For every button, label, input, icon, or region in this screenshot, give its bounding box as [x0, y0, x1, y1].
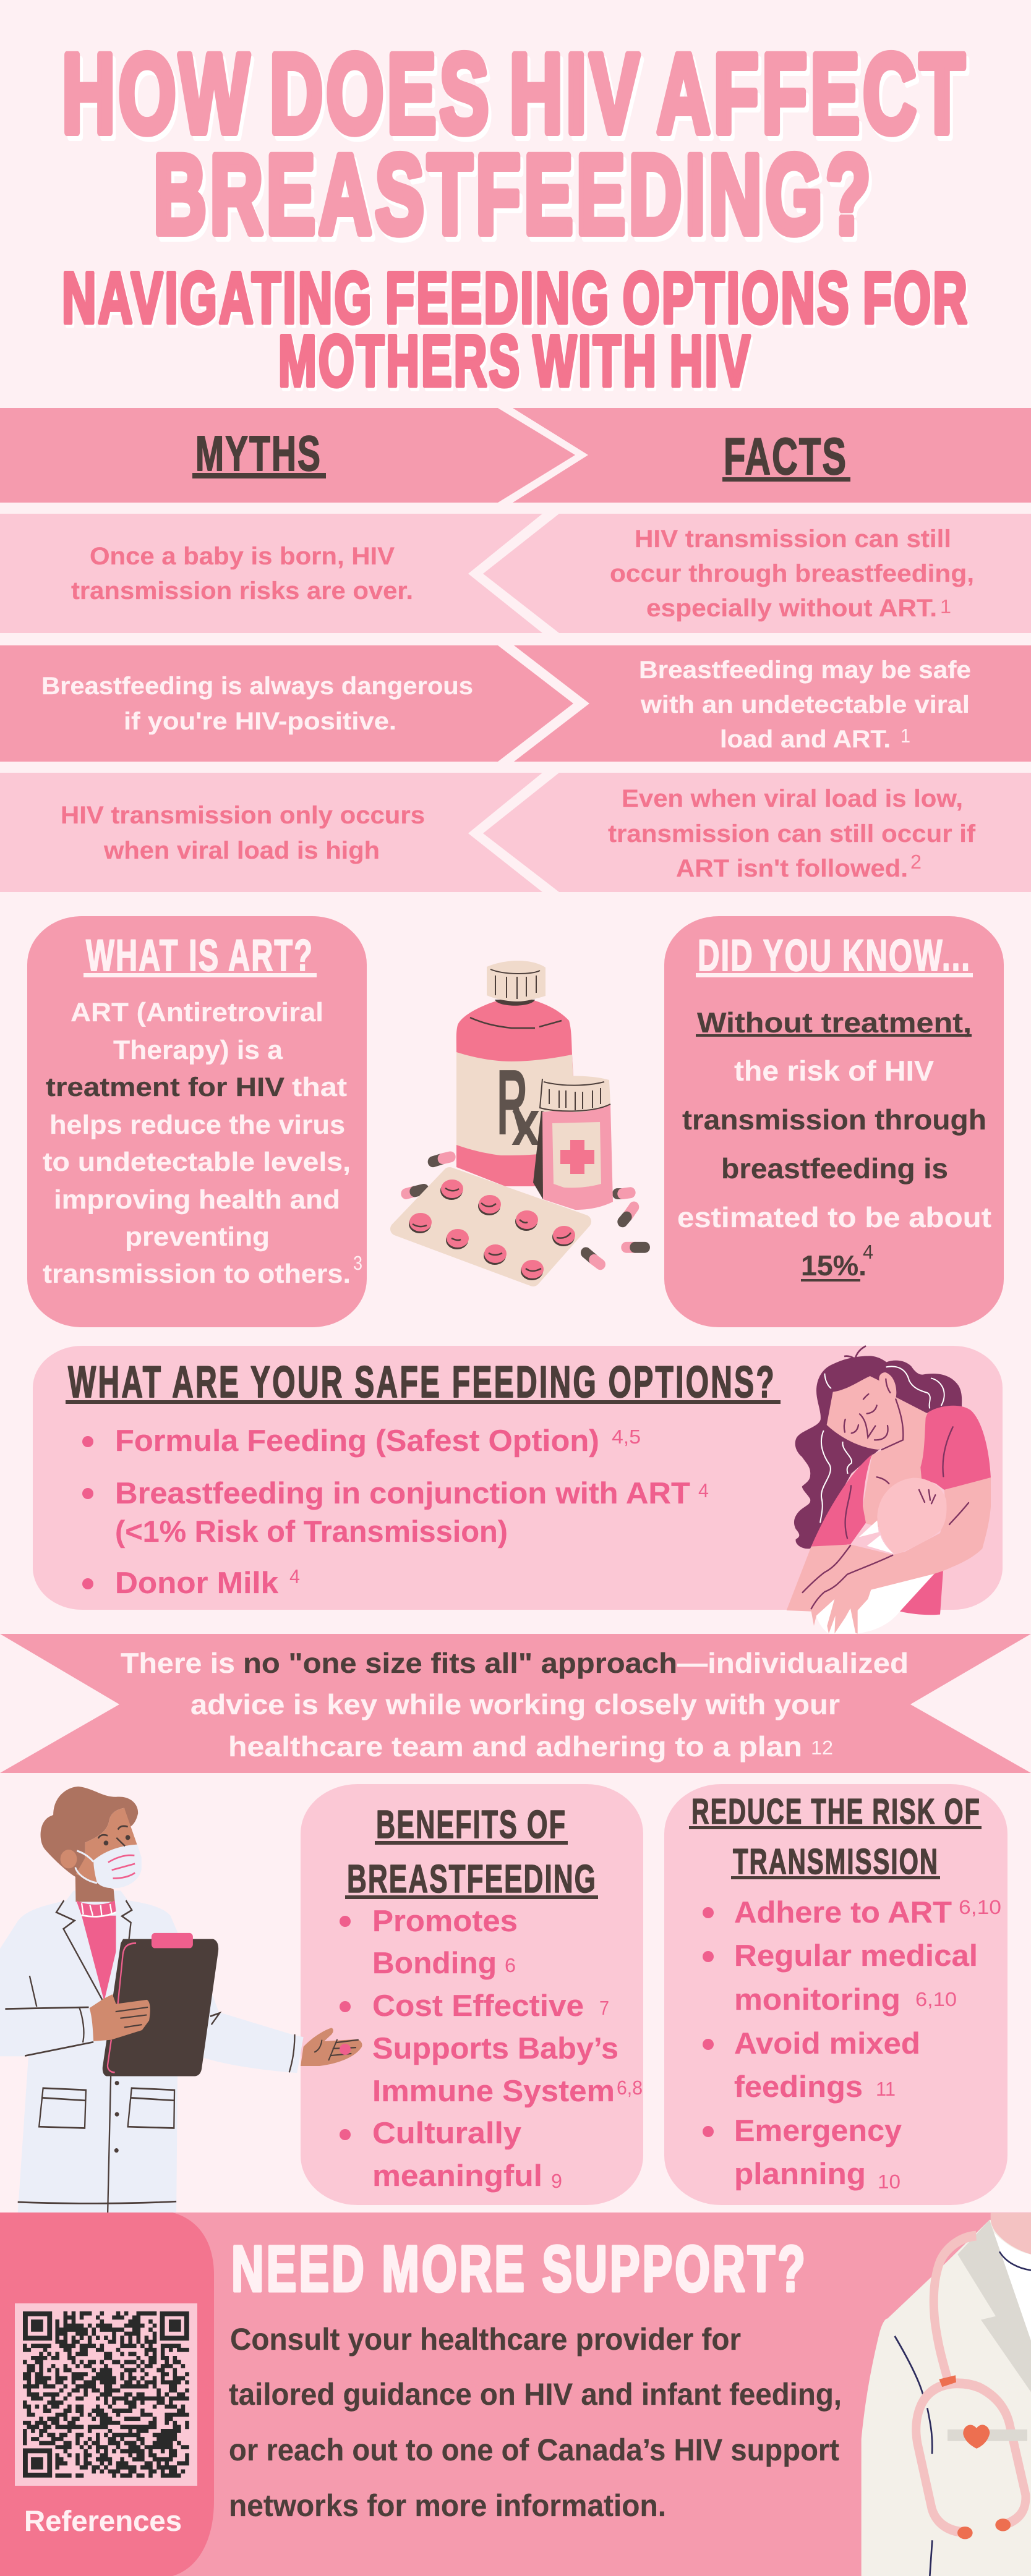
capsules	[406, 1157, 645, 1264]
panel: benefits of breastfeeding text	[340, 1802, 643, 2193]
list: benefits: meaningful	[372, 2159, 542, 2193]
panel: need more support footer	[0, 2213, 1031, 2576]
big bottle: R	[497, 1050, 528, 1154]
text: no one size fits all: —individualized	[677, 1647, 909, 1679]
list: benefits: Bonding	[372, 1947, 497, 1980]
small bottle	[533, 1076, 613, 1210]
illustration: doctor with clipboard	[0, 1787, 362, 2213]
myth fact row 1	[0, 514, 1031, 633]
heading: benefits: BENEFITS OF	[376, 1802, 567, 1847]
heading: benefits	[345, 1802, 598, 1901]
myth 3: HIV transmission only occurs	[61, 802, 425, 829]
banner: individualized advice	[0, 1634, 1031, 1773]
list: reduce risk: Adhere to ART	[734, 1896, 952, 1929]
title	[62, 30, 968, 257]
panel: what is ART	[27, 916, 367, 1327]
myths heading: MYTHS	[195, 426, 322, 481]
heading: reduce the risk	[689, 1792, 982, 1882]
fact 3: Even when viral load is low,	[622, 785, 963, 812]
text: ART definition: preventing	[125, 1222, 270, 1252]
myth 2	[41, 673, 473, 735]
fact 1: 1	[940, 595, 951, 618]
list: feeding options: Donor Milk	[115, 1566, 279, 1600]
list: feeding options	[82, 1424, 709, 1600]
list: reduce risk: feedings	[734, 2070, 863, 2104]
myth 2: if you're HIV-positive.	[124, 708, 396, 735]
panel: reduce the risk text	[689, 1792, 1001, 2193]
heading: what is ART: WHAT IS ART?	[86, 931, 314, 980]
text: consult your provider: Consult your healthcare provider for	[230, 2322, 741, 2357]
panel: reduce risk background	[664, 1784, 1007, 2205]
text: transmission risk fact: breastfeeding is	[721, 1152, 948, 1184]
myth 3: when viral load is high	[103, 837, 380, 864]
text: consult your provider: or reach out to one of Canada’s HIV support	[229, 2433, 839, 2467]
subtitle: MOTHERS WITH HIV	[278, 320, 752, 401]
illustration: doctor coat with stethoscope	[862, 2213, 1031, 2576]
list: feeding options: (<1% Risk of Transmission)	[115, 1515, 508, 1549]
text: ART definition: helps reduce the virus	[49, 1110, 345, 1140]
illustration: mother breastfeeding	[787, 1346, 991, 1634]
myth 3	[61, 802, 425, 864]
list: benefits: 6	[505, 1954, 516, 1976]
text: ART definition: treatment for HIV	[46, 1073, 284, 1102]
list: benefits: Immune System	[372, 2075, 615, 2108]
myth fact row 3	[0, 773, 1031, 892]
list: reduce risk: 11	[876, 2078, 896, 2100]
myth 1: Once a baby is born, HIV	[90, 543, 395, 570]
text: consult your provider	[229, 2322, 842, 2523]
list: benefits: 7	[599, 1997, 609, 2019]
text: no one size fits all: advice is key while working closely with your	[190, 1688, 840, 1720]
fact 1: occur through breastfeeding,	[610, 560, 974, 587]
list: benefits: 6,8	[617, 2077, 643, 2099]
list: benefits: Promotes	[372, 1905, 518, 1938]
fact 2: with an undetectable viral	[640, 691, 970, 718]
text: ART definition: transmission to others.	[43, 1259, 351, 1289]
big bottle: x	[511, 1087, 540, 1159]
text: no one size fits all: healthcare team and adhering to a plan	[228, 1730, 802, 1762]
myth fact row 2	[0, 645, 1031, 762]
text: ART definition: Therapy) is a	[113, 1035, 283, 1065]
list: benefits: Cost Effective	[372, 1989, 584, 2023]
heading: what is ART	[83, 931, 317, 980]
big bottle	[456, 961, 575, 1186]
text: ART definition: 3	[353, 1252, 362, 1274]
fact 2: 1	[901, 725, 910, 747]
subtitle	[62, 257, 969, 401]
myths and facts header band	[0, 408, 1031, 503]
fact 3: 2	[910, 851, 922, 873]
text: transmission risk fact: transmission through	[682, 1103, 986, 1136]
text: no one size fits all	[121, 1647, 909, 1762]
text: transmission risk fact: the risk of HIV	[734, 1055, 934, 1087]
list: reduce risk	[703, 1896, 1001, 2193]
list: reduce risk: monitoring	[734, 1983, 901, 2017]
text: consult your provider: networks for more information.	[229, 2488, 666, 2523]
list: feeding options: Formula Feeding (Safest Option)	[115, 1424, 599, 1458]
list: reduce risk: Avoid mixed	[734, 2027, 920, 2060]
heading: reduce the risk: TRANSMISSION	[733, 1842, 939, 1882]
list: feeding options: 4	[698, 1479, 709, 1502]
list: benefits: Culturally	[372, 2117, 521, 2150]
icon: medicine bottles and pills	[397, 961, 645, 1280]
list: reduce risk: Regular medical	[734, 1939, 978, 1973]
heading: benefits: BREASTFEEDING	[347, 1856, 597, 1901]
list: benefits: 9	[551, 2170, 562, 2192]
myth 1	[71, 543, 413, 605]
panel: benefits background	[301, 1784, 643, 2205]
fact 3: ART isn't followed.	[676, 855, 908, 882]
list: feeding options: 4	[289, 1565, 300, 1588]
fact 1: HIV transmission can still	[635, 525, 951, 553]
text: ART definition	[43, 998, 362, 1289]
blister pack	[397, 1174, 584, 1280]
text: ART definition: improving health and	[54, 1185, 340, 1215]
text: ART definition: to undetectable levels,	[43, 1147, 351, 1177]
myth 2: Breastfeeding is always dangerous	[41, 673, 473, 700]
text: transmission risk fact: 15%.	[801, 1249, 866, 1282]
text: transmission risk fact: 4	[863, 1241, 873, 1263]
list: reduce risk: Emergency	[734, 2114, 902, 2148]
list: reduce risk: 10	[878, 2170, 901, 2193]
references label: References	[24, 2504, 182, 2537]
panel: references tab	[0, 2213, 214, 2576]
text: transmission risk fact	[677, 1006, 991, 1282]
QR code	[15, 2303, 197, 2486]
fact 3	[608, 785, 976, 882]
list: reduce risk: 6,10	[915, 1988, 957, 2010]
fact 2: Breastfeeding may be safe	[639, 657, 971, 684]
list: feeding options: Breastfeeding in conjunction with ART	[115, 1477, 690, 1510]
text: transmission risk fact: estimated to be about	[677, 1201, 991, 1233]
list: benefits	[340, 1905, 643, 2193]
list: feeding options: 4,5	[612, 1426, 641, 1448]
fact 3: transmission can still occur if	[608, 820, 976, 848]
fact 2	[639, 657, 971, 753]
facts heading: FACTS	[724, 427, 847, 485]
text: ART definition: that	[292, 1073, 347, 1102]
list: reduce risk: planning	[734, 2157, 866, 2191]
text: no one size fits all: 12	[811, 1736, 833, 1759]
panel: did you know	[664, 916, 1004, 1327]
list: benefits: Supports Baby’s	[372, 2032, 618, 2065]
text: no one size fits all: no "one size fits all" approach	[243, 1647, 677, 1679]
text: transmission risk fact: Without treatment,	[697, 1006, 972, 1039]
text: no one size fits all: There is	[121, 1647, 235, 1679]
myth 1: transmission risks are over.	[71, 577, 413, 605]
text: consult your provider: tailored guidance on HIV and infant feeding,	[229, 2377, 842, 2412]
panel: safe feeding options	[33, 1346, 1003, 1610]
list: reduce risk: 6,10	[959, 1896, 1001, 1918]
text: ART definition: ART (Antiretroviral	[71, 998, 323, 1027]
fact 2: load and ART.	[720, 726, 891, 753]
fact 1: especially without ART.	[646, 595, 937, 622]
fact 1	[610, 525, 974, 622]
